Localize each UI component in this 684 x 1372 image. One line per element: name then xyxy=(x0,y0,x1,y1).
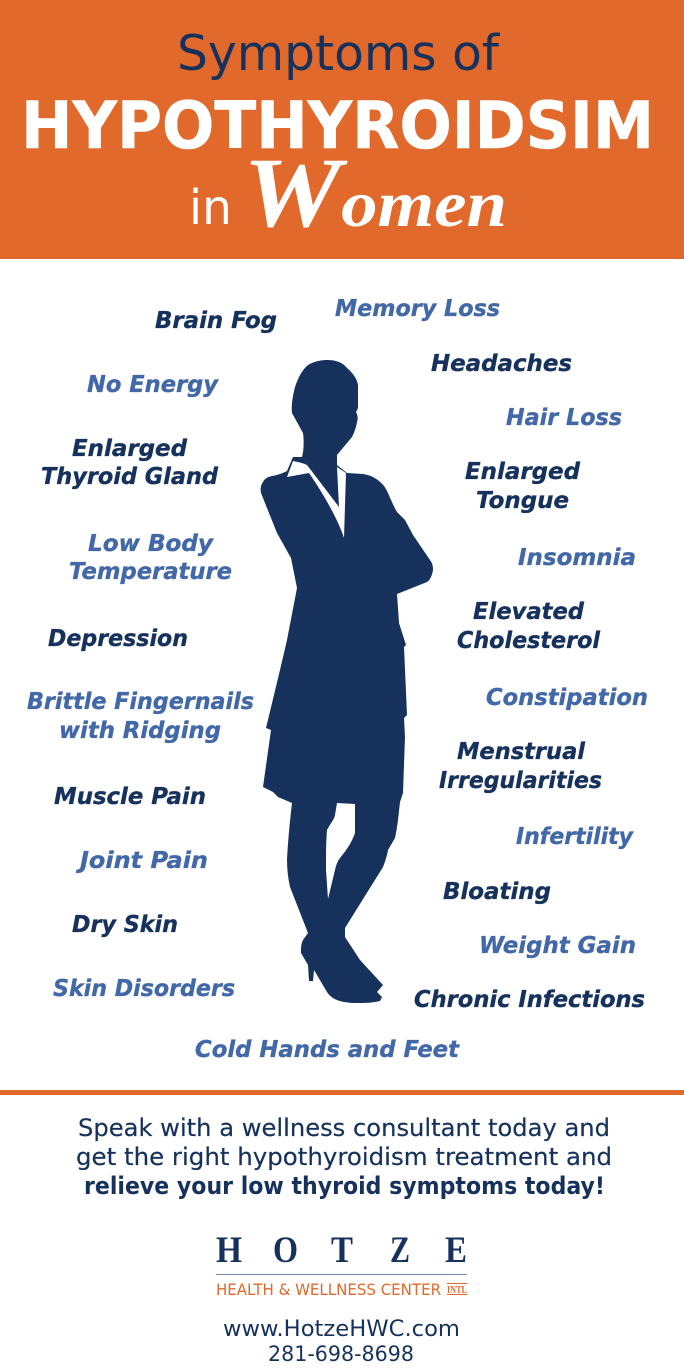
symptom: Irregularities xyxy=(439,768,602,794)
call to action: Speak with a wellness consultant today and xyxy=(78,1114,610,1142)
title word: in: in xyxy=(189,180,232,236)
header banner xyxy=(0,0,684,259)
symptom xyxy=(41,436,219,490)
phone: 281-698-8698 xyxy=(268,1342,414,1366)
symptom: Depression xyxy=(48,626,188,652)
logo wordmark: E xyxy=(445,1230,467,1271)
gap between legs xyxy=(326,803,355,899)
symptom: Enlarged xyxy=(465,459,581,485)
symptom: Low Body xyxy=(88,531,214,557)
title line: HYPOTHYROIDSIM: HYPOTHYROIDSIM xyxy=(21,89,654,164)
symptom: with Ridging xyxy=(59,718,221,744)
call to action: get the right hypothyroidism treatment and xyxy=(76,1143,612,1171)
symptom xyxy=(27,689,254,744)
symptom: Brain Fog xyxy=(155,308,277,334)
symptom xyxy=(465,459,581,514)
symptom: Headaches xyxy=(431,351,572,377)
symptom: Constipation xyxy=(486,685,648,711)
symptom: Tongue xyxy=(476,488,569,514)
divider xyxy=(0,1090,684,1095)
title line: Symptoms of: Symptoms of xyxy=(177,25,501,82)
shirt collar xyxy=(287,461,346,538)
logo wordmark xyxy=(216,1230,467,1271)
logo tagline: HEALTH & WELLNESS CENTER xyxy=(216,1280,441,1299)
symptom: Skin Disorders xyxy=(53,976,235,1002)
logo INTL mark: INTL xyxy=(447,1285,467,1296)
symptom: Thyroid Gland xyxy=(41,464,219,490)
symptom: Dry Skin xyxy=(72,912,178,938)
website: www.HotzeHWC.com xyxy=(223,1317,460,1342)
symptom: Infertility xyxy=(516,824,634,850)
symptom: Bloating xyxy=(443,879,551,905)
call to action xyxy=(76,1114,612,1200)
symptom xyxy=(69,531,232,585)
logo wordmark: T xyxy=(331,1230,353,1271)
symptom: Brittle Fingernails xyxy=(27,689,254,715)
symptom: Enlarged xyxy=(72,436,188,462)
symptom: Weight Gain xyxy=(479,933,636,959)
title word: Women script: Women xyxy=(243,137,507,248)
symptom: Temperature xyxy=(69,559,232,585)
symptom list: right column xyxy=(335,296,648,1013)
symptom: Chronic Infections xyxy=(414,987,645,1013)
symptom: Insomnia xyxy=(518,545,636,571)
woman silhouette xyxy=(261,360,433,1003)
logo wordmark: O xyxy=(273,1230,298,1271)
symptom: Cholesterol xyxy=(457,628,601,654)
logo wordmark: Z xyxy=(390,1230,410,1271)
symptom: Memory Loss xyxy=(335,296,500,322)
symptom list: left column xyxy=(27,308,277,1002)
symptom: Joint Pain xyxy=(76,848,208,874)
symptom: Menstrual xyxy=(457,739,586,765)
symptom xyxy=(457,599,601,654)
logo wordmark: H xyxy=(216,1230,242,1271)
call to action: relieve your low thyroid symptoms today! xyxy=(84,1172,605,1200)
symptom: cold hands and feet: Cold Hands and Feet xyxy=(195,1037,460,1063)
symptom: Elevated xyxy=(473,599,585,625)
symptom: No Energy xyxy=(87,372,219,398)
symptom: Hair Loss xyxy=(506,405,622,431)
symptom: Muscle Pain xyxy=(54,784,206,810)
symptom xyxy=(439,739,602,794)
logo xyxy=(216,1230,467,1299)
